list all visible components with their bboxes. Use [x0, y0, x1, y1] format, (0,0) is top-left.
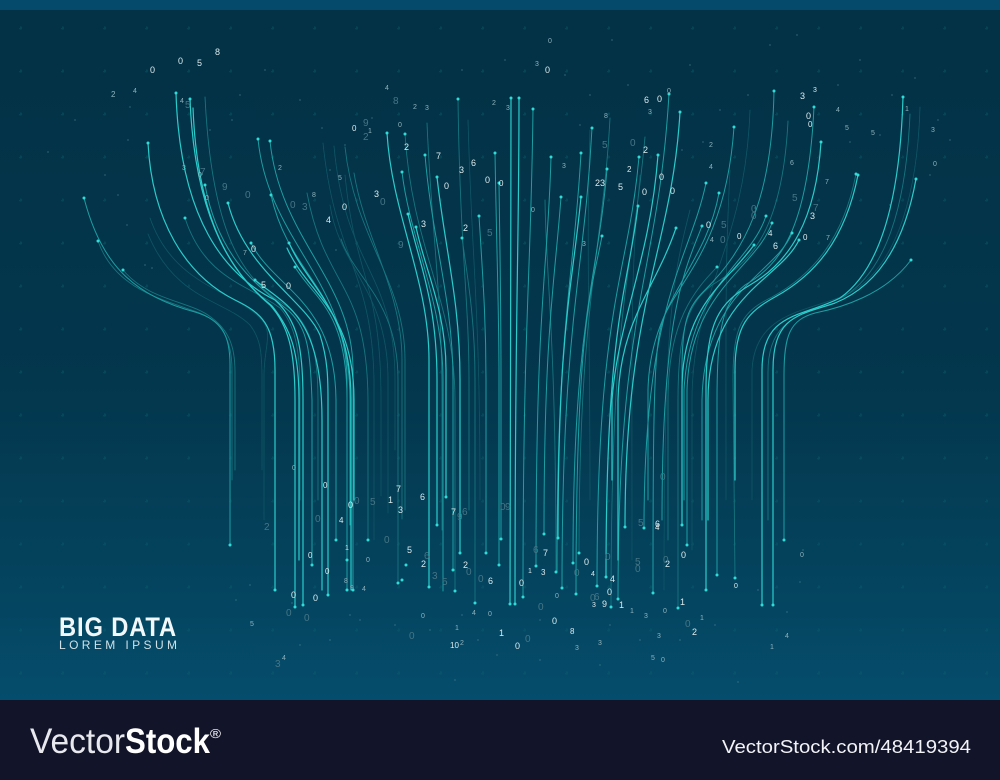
dim digits: 7 — [813, 203, 819, 214]
dim digits: 7 — [200, 167, 206, 178]
dim digits: 0 — [500, 502, 506, 513]
small digits: 5 — [845, 125, 849, 132]
dim digits: 0 — [286, 608, 292, 619]
bright digits: 0 — [308, 551, 313, 560]
dim digits: 0 — [751, 211, 757, 222]
bright digits: 2 — [627, 165, 632, 174]
bright digits: 0 — [806, 111, 811, 121]
small digits: 0 — [198, 172, 202, 179]
small digits: 3 — [657, 633, 661, 640]
bright digits: 0 — [808, 120, 813, 129]
small digits: 4 — [472, 610, 476, 617]
bright digits: 0 — [342, 202, 347, 212]
bright digits: 0 — [291, 590, 296, 600]
small digits: 3 — [562, 163, 566, 170]
bright digits: 0 — [642, 187, 647, 197]
small digits: 4 — [385, 85, 389, 92]
dim digits: 6 — [533, 545, 539, 556]
dim digits: 0 — [466, 567, 472, 578]
dim digits: 9 — [398, 240, 404, 251]
bright strands — [148, 93, 916, 607]
bright digits: 2 — [463, 560, 468, 570]
dim digits: 0 — [590, 593, 596, 604]
bright digits: 1 — [388, 495, 393, 505]
bright digits — [150, 47, 817, 651]
small digits: 7 — [826, 235, 830, 242]
dim digits: 0 — [751, 204, 757, 215]
small digits: 4 — [180, 98, 184, 105]
bright digits: 0 — [552, 616, 557, 626]
specks of data — [48, 35, 950, 682]
small digits: 1 — [455, 625, 459, 632]
dim digits: 5 — [370, 497, 376, 508]
bright digits: 6 — [773, 241, 778, 251]
small digits: 4 — [785, 633, 789, 640]
bright digits: 2 — [404, 142, 409, 152]
bright digits: 0 — [659, 172, 664, 182]
dim digits: 6 — [462, 507, 468, 518]
small digits: 0 — [800, 552, 804, 559]
small digits: 5 — [651, 655, 655, 662]
dim digits: 0 — [605, 552, 611, 563]
small digits: 3 — [598, 640, 602, 647]
small digits: 4 — [709, 164, 713, 171]
bright digits: 4 — [326, 215, 331, 225]
small digits: 3 — [535, 61, 539, 68]
bright digits: 1 — [345, 545, 349, 552]
small digits: 7 — [825, 179, 829, 186]
bright digits: 0 — [352, 124, 357, 133]
bright digits: 23 — [595, 178, 605, 188]
footer logo: ® — [210, 726, 221, 741]
dim digits: 5 — [442, 577, 448, 588]
small digits: 0 — [205, 195, 209, 202]
small digits: 1 — [770, 644, 774, 651]
small digits: 0 — [663, 608, 667, 615]
dim digits: 5 — [185, 100, 191, 111]
bright digits: 3 — [541, 568, 546, 577]
small digits: 0 — [661, 657, 665, 664]
bright digits: 1 — [528, 568, 532, 575]
small digits: 3 — [506, 105, 510, 112]
bright digits: 6 — [655, 519, 660, 529]
bright digits: 9 — [602, 599, 607, 609]
top strip — [0, 0, 1000, 10]
bright digits: 0 — [178, 56, 183, 66]
bright digits: 2 — [665, 559, 670, 569]
bright digits: 0 — [545, 65, 550, 75]
bright digits: 0 — [607, 587, 612, 597]
dim digits: 6 — [594, 592, 600, 603]
bright digits: 8 — [570, 627, 575, 636]
small digits: 0 — [488, 611, 492, 618]
small digits: 7 — [243, 250, 247, 257]
dim digits: 9 — [222, 182, 228, 193]
dim digits: 5 — [638, 518, 644, 529]
bright digits: 0 — [150, 65, 155, 75]
dim digits: 0 — [290, 200, 296, 211]
bright digits: 4 — [339, 516, 344, 525]
bright digits: 0 — [681, 550, 686, 560]
bright digits: 1 — [499, 628, 504, 638]
title: big data: BIG DATA — [59, 612, 177, 642]
bright digits: 5 — [261, 280, 266, 290]
bright digits: 5 — [618, 182, 623, 192]
bright digits: 2 — [692, 627, 697, 637]
bright digits: 3 — [813, 87, 817, 94]
dim digits: 0 — [685, 619, 691, 630]
bright digits: 0 — [584, 557, 589, 567]
small digits: 2 — [111, 90, 116, 99]
bright digits: 3 — [374, 189, 379, 199]
small digits: 4 — [282, 655, 286, 662]
bright digits: 0 — [657, 94, 662, 104]
small digits: 5 — [871, 130, 875, 137]
dim digits: 0 — [660, 472, 666, 483]
bright digits: 0 — [313, 593, 318, 603]
bright digits: 0 — [348, 500, 353, 510]
dim digits: 0 — [630, 138, 636, 149]
bright digits: 0 — [325, 567, 330, 576]
dim digits: 8 — [393, 96, 399, 107]
small digits: 8 — [312, 192, 316, 199]
bright digits: 3 — [459, 165, 464, 175]
data strands — [84, 91, 920, 608]
dim digits: 0 — [245, 190, 251, 201]
dim digits: 2 — [363, 132, 369, 143]
dim digits: 9 — [505, 502, 511, 513]
small digits: 2 — [460, 640, 464, 647]
bright digits: 7 — [396, 484, 401, 494]
small digits: 3 — [575, 645, 579, 652]
dim digits: 0 — [354, 496, 360, 507]
small digits: 5 — [250, 621, 254, 628]
small digits: 1 — [700, 615, 704, 622]
small digits: 0 — [292, 465, 296, 472]
bright digits: 3 — [810, 211, 815, 221]
dim digits: 0 — [409, 631, 415, 642]
dim digits: 0 — [635, 564, 641, 575]
bright digits: 7 — [451, 507, 456, 517]
bright digits: 0 — [706, 220, 711, 230]
small digits: 0 — [933, 161, 937, 168]
small digits: 0 — [398, 122, 402, 129]
small digits: 9 — [350, 585, 354, 592]
small digits: 1 — [368, 128, 372, 135]
medium strands — [84, 91, 911, 599]
faint strands — [148, 107, 920, 590]
dim digits: 5 — [792, 193, 798, 204]
bright digits: 3 — [398, 505, 403, 515]
footer band — [0, 700, 1000, 780]
small digits: 2 — [413, 104, 417, 111]
bright digits: 0 — [444, 181, 449, 191]
dim digits: 0 — [574, 568, 580, 579]
dim digits: 5 — [635, 557, 641, 568]
bright digits: 0 — [519, 578, 524, 588]
bright digits: 0 — [670, 186, 675, 196]
bright digits: 6 — [420, 492, 425, 502]
small digits: 4 — [133, 88, 137, 95]
dim digits: 3 — [432, 571, 438, 582]
bright digits: 4 — [768, 229, 773, 238]
bright digits: 0 — [737, 232, 742, 241]
bright digits: 6 — [471, 158, 476, 168]
floating digits — [111, 38, 937, 670]
bright digits: 3 — [421, 219, 426, 229]
bright digits: 6 — [644, 95, 649, 105]
bright digits: 2 — [463, 223, 468, 233]
bright digits: 8 — [215, 47, 220, 57]
dim digits: 9 — [363, 118, 369, 129]
bright digits: 10 — [450, 641, 459, 650]
small digits: 3 — [931, 127, 935, 134]
dim digits: 5 — [721, 220, 727, 231]
bright digits: 4 — [610, 574, 615, 584]
bright digits: 7 — [543, 548, 548, 558]
small digits: 0 — [555, 593, 559, 600]
bright digits: 0 — [734, 583, 738, 590]
dim digits: 5 — [602, 140, 608, 151]
bright digits: 0 — [803, 233, 808, 242]
small digits: 3 — [644, 613, 648, 620]
dim digits: 0 — [380, 197, 386, 208]
bright digits: 4 — [591, 571, 595, 578]
dim digits: 6 — [424, 551, 430, 562]
bright digits: 0 — [251, 244, 256, 254]
dim strands — [98, 97, 910, 608]
bright digits: 6 — [488, 576, 493, 586]
bright digits: 4 — [655, 523, 660, 532]
strand end dots — [84, 91, 916, 608]
dim digits: 9 — [457, 512, 463, 523]
dim digits: 0 — [720, 235, 726, 246]
bright digits: 1 — [619, 600, 624, 610]
subtitle: lorem ipsum: LOREM IPSUM — [59, 638, 177, 652]
small digits: 0 — [548, 38, 552, 45]
dim digits: 5 — [487, 228, 493, 239]
footer logo: Stock — [125, 722, 210, 761]
small digits: 0 — [421, 613, 425, 620]
small digits: 4 — [836, 107, 840, 114]
bright digits: 3 — [800, 91, 805, 101]
small digits — [111, 38, 937, 664]
small digits: 6 — [790, 160, 794, 167]
dim digits: 0 — [525, 634, 531, 645]
bright digits: 0 — [515, 641, 520, 651]
small digits: 4 — [362, 586, 366, 593]
small digits: 3 — [182, 165, 186, 172]
bright digits: 7 — [436, 151, 441, 161]
bright digits: 2 — [421, 559, 426, 569]
small digits: 0 — [667, 88, 671, 95]
small digits: 4 — [710, 237, 714, 244]
dim digits: 3 — [302, 202, 308, 213]
bright digits: 5 — [197, 58, 202, 68]
small digits: 3 — [425, 105, 429, 112]
dim digits: 3 — [275, 659, 281, 670]
footer logo — [30, 722, 221, 761]
small digits: 3 — [648, 109, 652, 116]
dim digits — [185, 96, 819, 670]
small digits: 5 — [338, 175, 342, 182]
small digits: 0 — [366, 557, 370, 564]
bright digits: 5 — [407, 545, 412, 555]
dim digits: 2 — [264, 522, 270, 533]
bright digits: 0 — [286, 281, 291, 291]
dim digits: 0 — [538, 602, 544, 613]
bright digits: 2 — [643, 145, 648, 155]
dim digits: 0 — [663, 555, 669, 566]
small digits: 8 — [604, 113, 608, 120]
small digits: 2 — [492, 100, 496, 107]
bright digits: 0 — [499, 179, 504, 188]
bright digits: 0 — [485, 175, 490, 185]
footer image id: VectorStock.com/48419394 — [722, 737, 971, 757]
small digits: 2 — [709, 142, 713, 149]
dim digits: 0 — [315, 514, 321, 525]
dim digits: 0 — [478, 574, 484, 585]
bright digits: 0 — [323, 481, 328, 490]
footer logo: Vector — [30, 722, 125, 761]
small digits: 2 — [278, 165, 282, 172]
dim digits: 0 — [304, 613, 310, 624]
small digits: 3 — [582, 241, 586, 248]
small digits: 0 — [531, 207, 535, 214]
dim digits: 0 — [384, 535, 390, 546]
bright digits: 3 — [592, 602, 596, 609]
bright digits: 1 — [680, 597, 685, 607]
small digits: 8 — [344, 578, 348, 585]
small digits: 1 — [630, 608, 634, 615]
small digits: 1 — [905, 106, 909, 113]
